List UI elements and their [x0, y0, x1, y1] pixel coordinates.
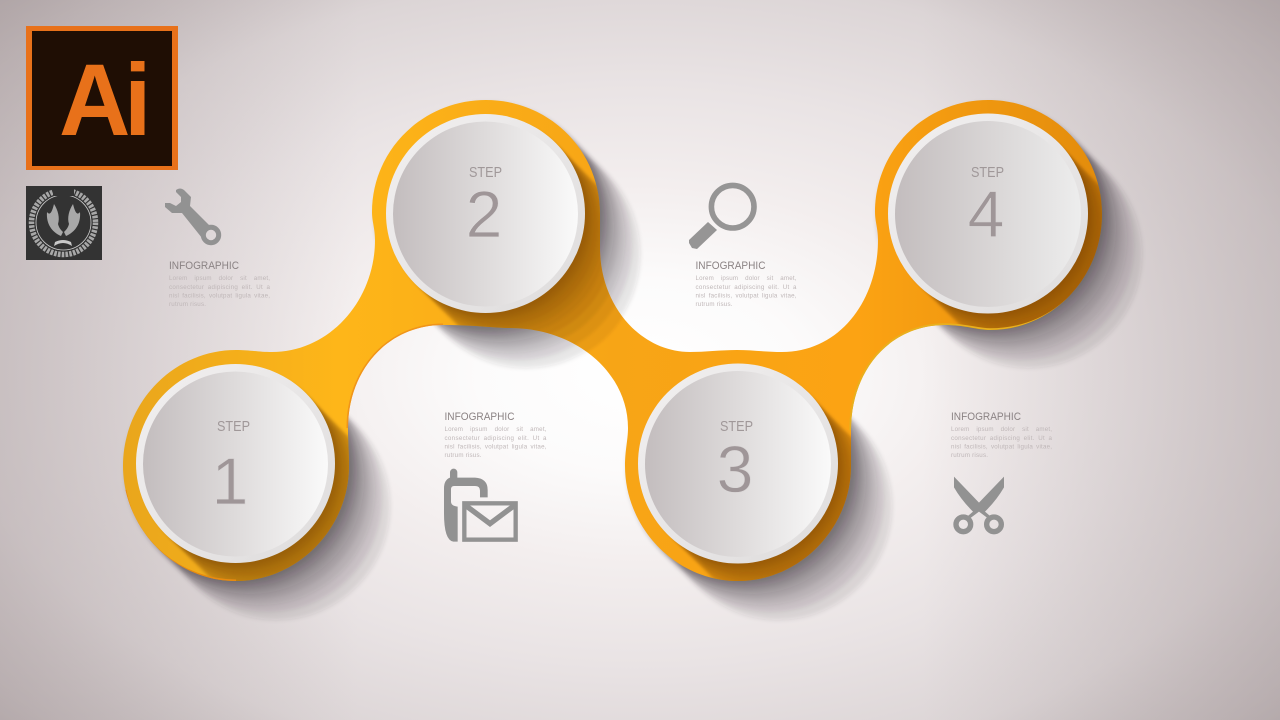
step 3 disc: 3 [717, 432, 753, 506]
text block: phone step: Lorem ipsum dolor sit amet, [444, 426, 547, 433]
text block: magnifier step: Lorem ipsum dolor sit amet, [696, 275, 797, 282]
text block: phone step: nisl facilisis, volutpat ligula vitae, [444, 444, 547, 450]
text block: scissors step: consectetur adipiscing elit. Ut a [951, 435, 1053, 442]
step 1 disc: 1 [212, 444, 248, 518]
text block: wrench step [169, 260, 271, 308]
text block: magnifier step: rutrum risus. [696, 301, 733, 308]
text block: phone step: consectetur adipiscing elit. Ut a [444, 435, 547, 442]
text block: phone step [444, 411, 547, 459]
logo: laurel wreath badge [26, 186, 102, 260]
step 2 disc: 2 [466, 177, 502, 251]
logo: Adobe Illustrator: A [59, 44, 130, 157]
text block: scissors step [951, 411, 1053, 459]
long shadows cast by discs on the ribbon [126, 139, 1102, 581]
step 1 disc: STEP [217, 418, 250, 435]
text block: wrench step: consectetur adipiscing elit. Ut a [169, 284, 271, 291]
text block: wrench step: INFOGRAPHIC [169, 260, 239, 272]
step 2 disc [386, 114, 585, 313]
text block: scissors step: nisl facilisis, volutpat ligula vitae, [951, 444, 1052, 450]
orange connecting ribbon [123, 100, 1102, 581]
text block: magnifier step [696, 260, 797, 308]
step 4 disc: 4 [968, 177, 1004, 251]
text block: phone step: INFOGRAPHIC [444, 411, 515, 423]
text block: phone step: rutrum risus. [444, 452, 482, 459]
text block: scissors step: Lorem ipsum dolor sit amet, [951, 426, 1052, 433]
icon: wrench [165, 188, 219, 243]
text block: wrench step: rutrum risus. [169, 301, 206, 308]
logo: Adobe Illustrator: i [124, 44, 151, 157]
icon: magnifier [689, 185, 754, 249]
background shadows of the orange ribbon [124, 102, 1142, 620]
icon: scissors [954, 477, 1004, 532]
text block: wrench step: Lorem ipsum dolor sit amet, [169, 275, 270, 282]
step 2 disc: STEP [469, 164, 502, 181]
step 1 disc [136, 364, 335, 563]
step 4 disc: STEP [971, 164, 1004, 181]
text block: scissors step: INFOGRAPHIC [951, 411, 1021, 423]
step 3 disc: STEP [720, 418, 753, 435]
text block: wrench step: nisl facilisis, volutpat ligula vitae, [169, 292, 270, 300]
text block: magnifier step: consectetur adipiscing elit. Ut a [696, 284, 797, 291]
icon: phone and envelope [444, 469, 516, 542]
text block: scissors step: rutrum risus. [951, 452, 988, 459]
step 3 disc [638, 364, 838, 564]
logo: Adobe Illustrator [26, 26, 178, 170]
step 4 disc [888, 114, 1088, 314]
text block: magnifier step: nisl facilisis, volutpat ligula vitae, [696, 292, 797, 300]
text block: magnifier step: INFOGRAPHIC [696, 260, 766, 272]
